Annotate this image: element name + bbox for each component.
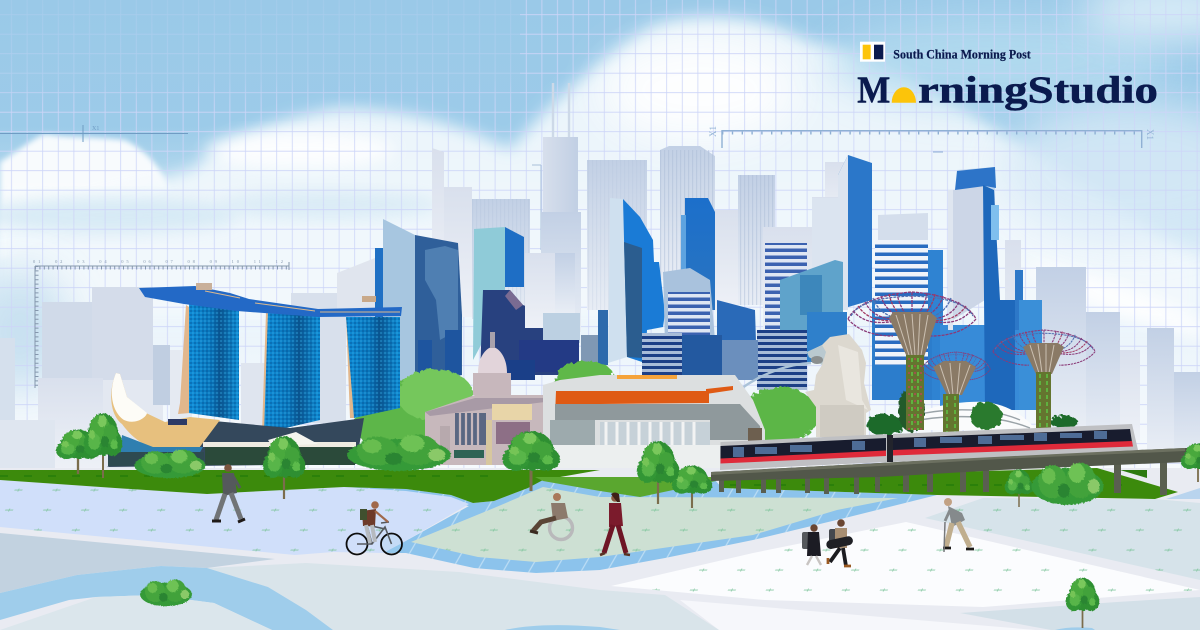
logo: morning studio [857,70,1158,112]
ruler: top right: X1 [708,126,718,137]
water channel [340,478,937,573]
ruler: top right [708,126,1155,152]
blue mass behind supertrees [872,250,1022,410]
lower plazas [680,600,1036,630]
far skyline: pale towers [0,83,1200,470]
clouds [0,0,1200,390]
dark shrubs [867,388,1078,436]
grey-blue plaza right [925,498,1200,580]
trees [56,413,1200,628]
logo: morning studio: rningStudio [918,70,1158,112]
logo sun [892,87,916,103]
schoolboy with board [825,519,854,566]
lawn [0,468,1178,503]
centre grey plaza [207,563,719,630]
artscience museum and podium [107,373,364,467]
logo: south china morning post [860,42,1031,62]
blueprint rulers [0,125,1155,388]
skypark [139,286,402,317]
logo icon [860,42,885,62]
ruler: top left: X1 [92,126,99,132]
ruler: top right: X1 [1145,129,1155,140]
lavender plaza [0,480,469,555]
marina bay sands towers [139,283,402,433]
foliage behind the heritage buildings [355,361,818,460]
ground and plazas [0,468,1200,630]
conservatory dome [887,402,1036,430]
logo: morning studio: M [857,70,890,112]
supertree 3 [993,330,1095,430]
bottom right plaza [960,597,1200,630]
mrt train [720,424,1138,470]
small water pools [505,625,1095,630]
mid skyline: glass towers [375,155,1042,410]
elderly man with cane [943,498,974,552]
supertree 1 [848,292,976,430]
ruler: left of marina bay: 01 02 03 04 05 06 07 08 09 10 11 12 [33,259,283,264]
ruler: top left [0,125,188,142]
woman in red suit [600,492,630,555]
national gallery building [425,332,545,465]
fullerton building [543,375,765,477]
elevated rail viaduct [711,448,1200,495]
person in wheelchair [530,493,572,540]
schoolgirl [802,524,821,565]
ruler: left of marina bay [33,259,289,388]
cyclist [346,501,402,554]
blue corner [1166,488,1200,499]
bottom left grey plaza [0,533,275,593]
white plaza [611,522,1200,607]
logo: south china morning post: South China Morning Post [893,47,1031,62]
ruler: central small [532,165,541,250]
person walking with phone [212,464,245,522]
green plaza [411,487,898,562]
merlion statue [742,334,871,437]
supertree 2 [922,352,990,432]
supertree grove: dome and planting [867,388,1078,436]
lower left water [0,566,333,630]
lower left island [0,595,272,630]
